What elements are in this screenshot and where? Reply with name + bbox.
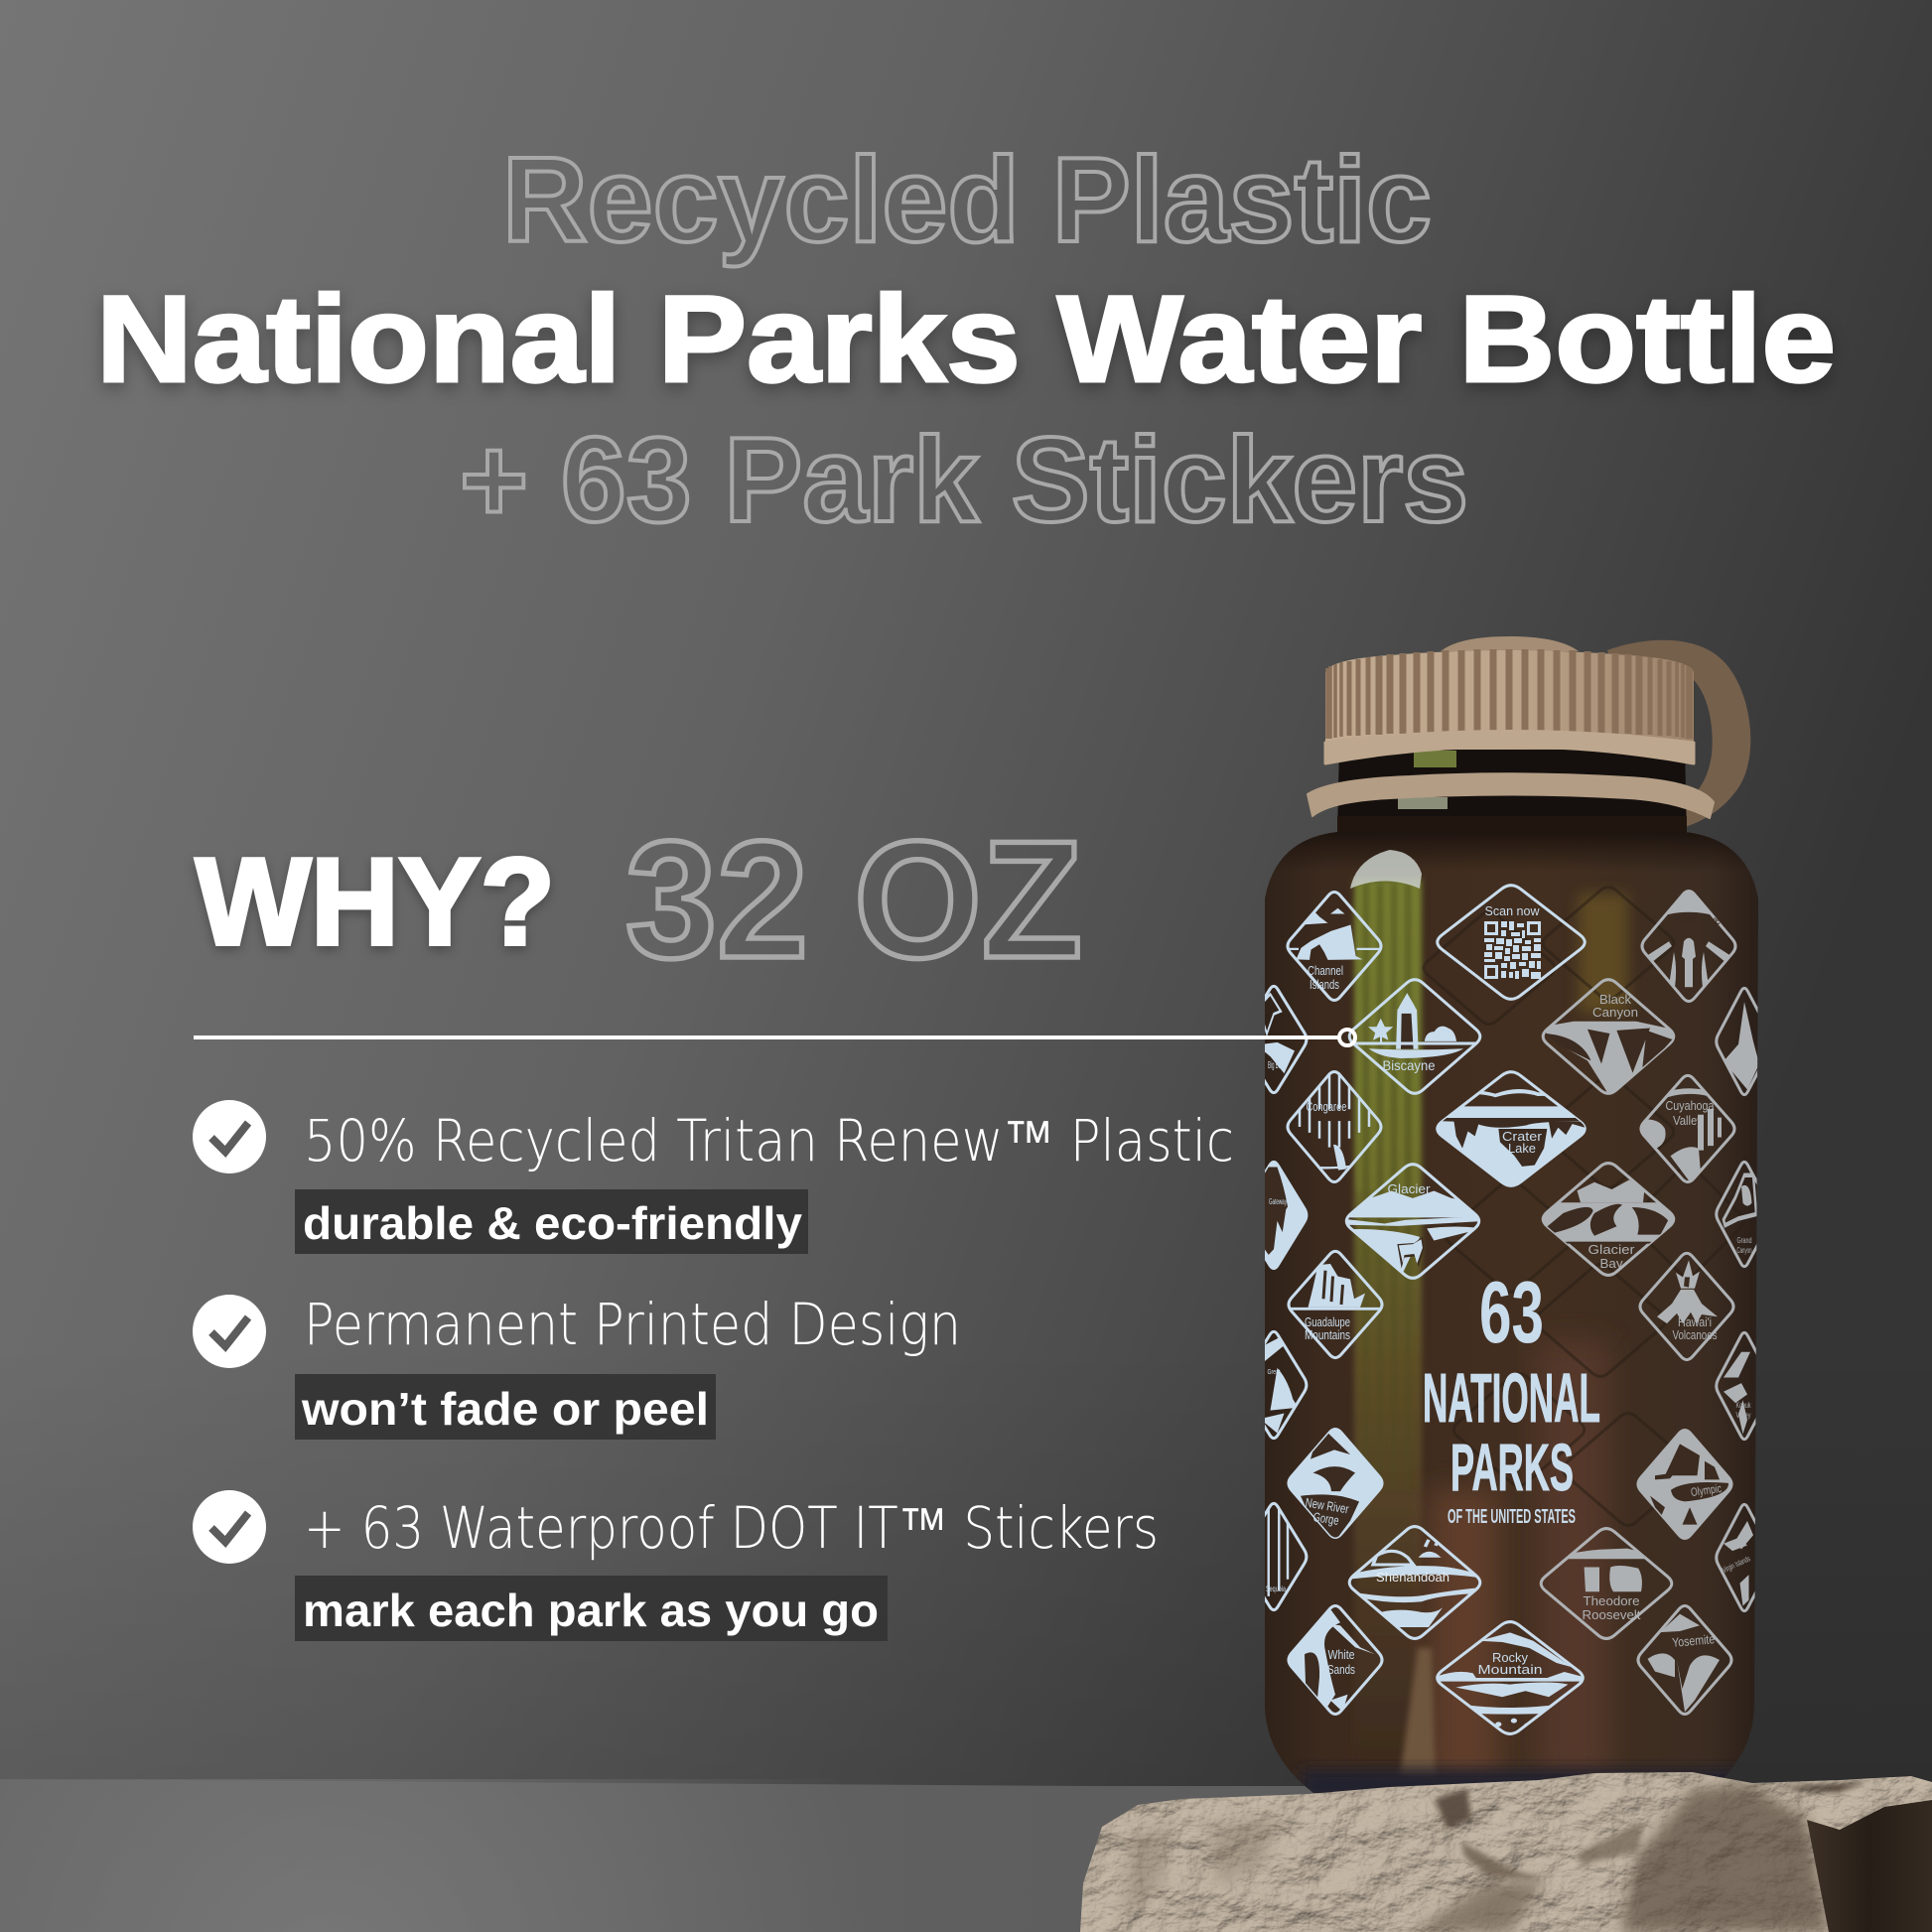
feature 1 [193, 1100, 1234, 1254]
badge: Guadalupe Mountains: Mountains [1305, 1327, 1350, 1342]
badge: New River Gorge: New River [1305, 1495, 1350, 1516]
badge: Gateway Arch: Gateway [1269, 1197, 1287, 1206]
feature 1 text: 50% Recycled Tritan Renew™ Plastic [304, 1107, 1234, 1174]
bottle [1239, 636, 1772, 1802]
cap ribs [1327, 649, 1691, 739]
badge: right edge Virgin Islands: Virgin Islands [1721, 1554, 1751, 1575]
badge: Theodore Roosevelt: Roosevelt [1583, 1607, 1641, 1622]
badge: Grand Canyon edge [1715, 1160, 1757, 1269]
badge: Great Smoky: Great [1267, 1369, 1281, 1376]
bottle print: PARKS: PARKS [1450, 1431, 1574, 1505]
badge: Rocky Mountain [1433, 1622, 1587, 1733]
icon: check 3 [193, 1490, 266, 1564]
badge: Wind Cave [1639, 888, 1738, 1002]
badge: Scan now QR: Scan now [1485, 903, 1540, 918]
bottle cap [1325, 636, 1694, 763]
badge: Hawaii Volcanoes: Volcanoes [1672, 1327, 1718, 1342]
badge: Big Bend: Big Bend [1268, 1060, 1286, 1071]
bottle strap loop [1607, 640, 1750, 828]
bottle print: 63: 63 [1479, 1263, 1544, 1361]
bottle neck [1337, 745, 1687, 836]
badge: New River Gorge [1286, 1426, 1385, 1541]
badge: Biscayne [1345, 980, 1484, 1093]
feature list [193, 1100, 1234, 1641]
badge: Guadalupe Mountains [1286, 1251, 1385, 1358]
feature 1 tag background [295, 1189, 808, 1254]
badge: Hawaii Volcanoes [1640, 1253, 1733, 1360]
cap top nub [1441, 636, 1579, 651]
feature 2 text: Permanent Printed Design [304, 1291, 961, 1358]
faint reverse-side badges [1424, 888, 1743, 1525]
badge: White Sands: Sands [1327, 1662, 1355, 1677]
badge: Black Canyon: Canyon [1592, 1005, 1638, 1020]
badge: Grand Canyon edge: Grand [1737, 1236, 1751, 1245]
feature 3 tag text: mark each park as you go [303, 1585, 879, 1636]
badge: Big Bend [1265, 985, 1309, 1094]
badge: Theodore Roosevelt [1541, 1529, 1672, 1638]
badge: Gateway Arch [1265, 1160, 1309, 1271]
feature 1 tag text: durable & eco-friendly [303, 1197, 802, 1249]
badge: Theodore Roosevelt: Theodore [1583, 1593, 1640, 1608]
badge: right edge Virgin Islands [1715, 1503, 1755, 1612]
badge: Yosemite: Yosemite [1672, 1631, 1716, 1650]
badge: Channel Islands: Islands [1310, 977, 1339, 992]
badge: Yosemite [1638, 1605, 1731, 1715]
badge: Crater Lake [1433, 1072, 1589, 1189]
QR code [1484, 921, 1541, 979]
feature 2 tag background [295, 1374, 716, 1440]
bottle flange ring [1308, 773, 1714, 818]
badge: Sequoia [1265, 1501, 1309, 1612]
badge: Rocky Mountain: Rocky [1492, 1650, 1528, 1665]
badge: Shenandoah [1345, 1527, 1484, 1638]
badge: Black Canyon [1539, 980, 1678, 1094]
badge: Grand Canyon edge: Canyon [1737, 1246, 1751, 1255]
badge: Congaree: Congaree [1307, 1099, 1346, 1114]
badge: right edge upper [1715, 987, 1757, 1096]
badge: Wind Cave: Wind Cave [1675, 912, 1721, 927]
badge: Biscayne: Biscayne [1382, 1057, 1436, 1073]
bottle body [1261, 830, 1763, 1802]
badge: Sequoia: Sequoia [1266, 1585, 1286, 1593]
badge: Scan now QR [1438, 886, 1585, 999]
badge: Glacier Bay: Bay [1600, 1256, 1623, 1271]
title: Recycled Plastic: Recycled Plastic [502, 132, 1432, 267]
badge: Glacier Bay: Glacier [1588, 1242, 1635, 1257]
park badges printed on bottle [1239, 886, 1772, 1733]
badge: Olympic: Olympic [1690, 1481, 1723, 1499]
feature 2 tag text: won’t fade or peel [301, 1383, 709, 1435]
heading: 32 OZ: 32 OZ [625, 806, 1082, 993]
badge: Hawaii Volcanoes: Hawai'i [1678, 1314, 1712, 1329]
badge: right edge Kobuk Valley: Kobuk [1735, 1401, 1751, 1410]
title: 63 Park Stickers: + 63 Park Stickers [460, 412, 1468, 547]
badge: Guadalupe Mountains: Guadalupe [1305, 1314, 1350, 1329]
badge: White Sands: White [1328, 1647, 1354, 1662]
badge: Crater Lake: Crater [1502, 1129, 1543, 1144]
badge: Olympic [1635, 1427, 1734, 1542]
badge: Cuyahoga Valley: Valley [1673, 1113, 1703, 1128]
badge: Channel Islands [1285, 892, 1384, 1001]
badge: Channel Islands: Channel [1308, 963, 1343, 978]
cap rim [1325, 731, 1694, 763]
badge: Glacier [1342, 1165, 1483, 1282]
heading: WHY?: WHY? [196, 834, 555, 971]
badge: Cuyahoga Valley: Cuyahoga [1666, 1098, 1715, 1113]
callout line to Biscayne badge [194, 1030, 1355, 1045]
badge: Crater Lake: Lake [1508, 1141, 1536, 1156]
bottle print: OF THE UNITED STATES: OF THE UNITED STATES [1448, 1506, 1576, 1528]
floor shelf [0, 1779, 1932, 1932]
badge: Shenandoah: Shenandoah [1376, 1570, 1449, 1585]
badge: Cuyahoga Valley [1638, 1075, 1734, 1182]
badge: Glacier: Glacier [1388, 1181, 1431, 1196]
badge: Glacier Bay [1539, 1164, 1678, 1275]
rock shadows [1122, 1783, 1932, 1932]
badge: Congaree [1285, 1068, 1384, 1181]
cap body [1325, 650, 1694, 750]
badge: Black Canyon: Black [1599, 992, 1631, 1007]
feature 3 text: + 63 Waterproof DOT IT™ Stickers [304, 1494, 1159, 1562]
badge: White Sands [1286, 1602, 1382, 1718]
badge: right edge Kobuk Valley: Valley [1735, 1411, 1751, 1420]
badge: New River Gorge: Gorge [1312, 1509, 1340, 1528]
feature 2 [193, 1291, 961, 1440]
badge: right edge Kobuk Valley [1715, 1330, 1756, 1442]
icon: check 1 [193, 1100, 266, 1173]
icon: check 2 [193, 1295, 266, 1368]
rock pedestal [1080, 1772, 1932, 1932]
title: National Parks Water Bottle: National Parks Water Bottle [96, 271, 1836, 408]
feature 3 tag background [295, 1576, 888, 1641]
badge: Great Smoky [1265, 1330, 1309, 1440]
feature 3 [193, 1490, 1159, 1641]
badge: Rocky Mountain: Mountain [1477, 1662, 1543, 1677]
bottle print: NATIONAL: NATIONAL [1423, 1359, 1600, 1437]
